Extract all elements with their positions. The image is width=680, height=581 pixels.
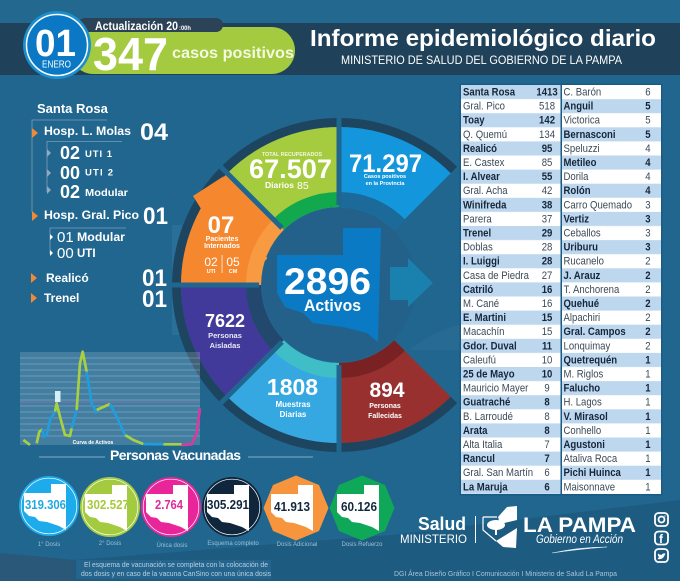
Hosp. Gral. Pico: 01 bbox=[143, 203, 168, 230]
badge: single dose bbox=[141, 477, 201, 549]
title bbox=[310, 25, 656, 67]
left column: 8 bbox=[544, 425, 550, 437]
right column: 5 bbox=[645, 115, 651, 127]
update time pill: Actualización 20 bbox=[95, 21, 178, 33]
right column: 4 bbox=[645, 186, 651, 197]
right column: 4 bbox=[645, 157, 651, 169]
badge: first dose bbox=[19, 476, 79, 548]
right column: 1 bbox=[645, 425, 651, 437]
right column: Alpachiri bbox=[564, 313, 600, 324]
sector: deaths: Fallecidas bbox=[368, 413, 402, 420]
left column: B. Larroudé bbox=[463, 411, 513, 423]
right column: 4 bbox=[645, 143, 651, 155]
title: MINISTERIO DE SALUD DEL GOBIERNO DE LA PAMPA bbox=[341, 55, 622, 67]
right column: H. Lagos bbox=[564, 397, 602, 409]
left column: 10 bbox=[542, 355, 553, 367]
vaccination footnote: El esquema de vacunación se completa con la colocación de bbox=[84, 560, 268, 569]
sector: total positive cases: Casos positivos bbox=[364, 174, 406, 180]
badge: second dose bbox=[80, 477, 140, 547]
sector: hospitalised patients: Internados bbox=[204, 243, 240, 250]
left column: Gral. Pico bbox=[463, 101, 505, 113]
right column: 1 bbox=[645, 468, 651, 479]
right column: 3 bbox=[645, 228, 651, 240]
sector: total positive cases: en la Provincia bbox=[366, 181, 405, 187]
right column: Bernasconi bbox=[564, 129, 616, 141]
sector: daily samples: Muestras bbox=[275, 400, 311, 409]
left column: 85 bbox=[542, 157, 553, 169]
Hosp. L. Molas: 00 bbox=[60, 163, 80, 183]
sector: recovered: 85 bbox=[297, 180, 309, 192]
left column: Catriló bbox=[463, 284, 493, 296]
header band bbox=[0, 11, 680, 80]
left column: 518 bbox=[539, 101, 555, 113]
left column: 8 bbox=[544, 397, 550, 409]
right column: J. Arauz bbox=[564, 270, 600, 282]
right column: Ataliva Roca bbox=[564, 454, 617, 465]
right column: Pichi Huinca bbox=[564, 468, 621, 479]
green pill: daily positive cases: 347 bbox=[93, 28, 168, 80]
left column: E. Castex bbox=[463, 157, 505, 169]
left column: Winifreda bbox=[463, 200, 507, 212]
update time pill bbox=[78, 18, 223, 33]
Hosp. Gral. Pico: 01 bbox=[57, 229, 74, 246]
background arrow bbox=[390, 258, 433, 307]
Hosp. L. Molas: UTI 2 bbox=[85, 168, 113, 178]
Hosp. Gral. Pico: Hosp. Gral. Pico bbox=[44, 209, 139, 222]
left column: 7 bbox=[544, 439, 550, 451]
logo: Ministerio de Salud bbox=[400, 514, 476, 546]
right column: Speluzzi bbox=[564, 143, 600, 155]
right column: 2 bbox=[645, 298, 651, 310]
footer credits: DGI Área Diseño Gráfico I Comunicación I Ministerio de Salud La Pampa bbox=[394, 569, 618, 578]
badge: booster dose: 60.126 bbox=[341, 499, 377, 514]
right column: Ceballos bbox=[564, 228, 601, 240]
vaccination footnote bbox=[76, 560, 271, 579]
Hosp. Gral. Pico bbox=[32, 203, 168, 262]
left column: Gral. Acha bbox=[463, 186, 508, 197]
date badge: 01 bbox=[35, 23, 76, 65]
Realicó: 01 bbox=[142, 265, 167, 292]
right column: Gral. Campos bbox=[564, 327, 626, 338]
left column: I. Alvear bbox=[463, 172, 500, 183]
sector: hospitalised patients: Pacientes bbox=[206, 236, 238, 243]
left column: Mauricio Mayer bbox=[463, 383, 529, 395]
left column: 37 bbox=[542, 214, 553, 226]
right column: 6 bbox=[645, 87, 651, 99]
badge: single dose: Única dosis bbox=[156, 542, 188, 549]
sector: deaths: 894 bbox=[369, 379, 405, 402]
update time pill: :00h bbox=[179, 25, 191, 32]
right column: Anguil bbox=[564, 101, 593, 113]
social media icons bbox=[655, 513, 668, 562]
left column: 9 bbox=[544, 383, 550, 395]
right column: Uriburu bbox=[564, 242, 598, 254]
left column: I. Luiggi bbox=[463, 256, 500, 268]
icon: twitter bbox=[655, 549, 668, 562]
sector: deaths: Personas bbox=[369, 403, 401, 410]
Hosp. Gral. Pico: UTI bbox=[77, 248, 96, 260]
Hosp. L. Molas: 04 bbox=[140, 119, 169, 146]
right column: Vertiz bbox=[564, 214, 589, 226]
Trenel: 01 bbox=[142, 286, 167, 313]
Realicó: Realicó bbox=[46, 271, 89, 285]
left column: 27 bbox=[542, 270, 553, 282]
left column: 15 bbox=[542, 327, 553, 338]
left column: Rancul bbox=[463, 454, 495, 465]
green pill: daily positive cases: casos positivos bbox=[172, 45, 294, 62]
sector: recovered bbox=[227, 127, 339, 230]
right column: 3 bbox=[645, 200, 651, 212]
left column: Trenel bbox=[463, 228, 491, 240]
left column: 28 bbox=[542, 242, 553, 254]
left column: 10 bbox=[542, 369, 553, 381]
left column: Toay bbox=[463, 115, 485, 127]
right column: Falucho bbox=[564, 383, 600, 395]
left column: 28 bbox=[542, 256, 553, 268]
panel: vaccinated people bbox=[19, 447, 394, 549]
logo: Ministerio de Salud: Salud bbox=[418, 514, 466, 534]
Realicó bbox=[31, 265, 167, 292]
left column: 42 bbox=[542, 186, 553, 197]
right column: 1 bbox=[645, 369, 651, 381]
Hosp. L. Molas: UTI 1 bbox=[85, 149, 113, 160]
sector: deaths bbox=[339, 340, 451, 443]
center map: active cases: 2896 bbox=[284, 261, 371, 302]
left column: 55 bbox=[542, 172, 553, 183]
left column: Macachín bbox=[463, 327, 505, 338]
left column: 134 bbox=[539, 129, 555, 141]
Trenel: Trenel bbox=[44, 291, 79, 305]
left column: Realicó bbox=[463, 143, 497, 155]
left column: 7 bbox=[544, 454, 550, 465]
sector: recovered: TOTAL RECUPERADOS bbox=[262, 152, 323, 158]
Trenel bbox=[31, 286, 167, 313]
badge: booster dose: Dosis Refuerzo bbox=[341, 542, 383, 548]
badge: additional dose bbox=[264, 476, 328, 548]
title: Informe epidemiológico diario bbox=[310, 25, 656, 51]
left column: Q. Quemú bbox=[463, 129, 507, 141]
left column: Arata bbox=[463, 425, 488, 437]
right column: 3 bbox=[645, 214, 651, 226]
left column: 142 bbox=[539, 115, 555, 127]
badge: complete schedule bbox=[202, 477, 262, 547]
right column: 1 bbox=[645, 482, 651, 494]
right column bbox=[564, 87, 651, 494]
right column: 5 bbox=[645, 129, 651, 141]
sector: recovered: Diarios bbox=[265, 180, 294, 190]
right column: Quetrequén bbox=[564, 355, 617, 367]
right column: 2 bbox=[645, 341, 651, 353]
date badge bbox=[23, 11, 91, 79]
right column: 3 bbox=[645, 242, 651, 254]
Hosp. L. Molas: 02 bbox=[60, 182, 80, 202]
left column: Gral. San Martín bbox=[463, 468, 533, 479]
sector: isolated people bbox=[181, 285, 284, 397]
right column: 2 bbox=[645, 256, 651, 268]
right column: Quehué bbox=[564, 298, 599, 310]
sector: daily samples: Diarias bbox=[280, 410, 307, 419]
center map: active cases: Activos bbox=[304, 296, 361, 315]
left column: Alta Italia bbox=[463, 439, 503, 451]
left column: M. Cané bbox=[463, 298, 499, 310]
badge: single dose: 2.764 bbox=[155, 497, 184, 512]
left column: 15 bbox=[542, 313, 553, 324]
sector: daily samples bbox=[227, 340, 339, 443]
Hosp. L. Molas: 02 bbox=[60, 143, 80, 163]
center map: active cases bbox=[277, 228, 381, 342]
right column: 1 bbox=[645, 411, 651, 423]
right column: Rucanelo bbox=[564, 256, 604, 268]
left column: 6 bbox=[544, 482, 550, 494]
sector: hospitalised patients: UTI bbox=[207, 269, 216, 275]
sector: hospitalised patients: 07 bbox=[208, 212, 234, 239]
logo: Ministerio de Salud: MINISTERIO bbox=[400, 532, 467, 546]
right column: V. Mirasol bbox=[564, 411, 608, 423]
badge: first dose: 319.306 bbox=[25, 497, 66, 512]
left column: La Maruja bbox=[463, 482, 508, 494]
right column: Metileo bbox=[564, 157, 596, 169]
sector: total positive cases bbox=[339, 127, 451, 230]
line chart: active cases curve: Curva de Activos bbox=[73, 440, 114, 446]
Hosp. L. Molas: Hosp. L. Molas bbox=[44, 124, 131, 138]
right column: M. Riglos bbox=[564, 369, 603, 381]
logo: La Pampa: Gobierno en Acción bbox=[536, 532, 623, 546]
left column: 8 bbox=[544, 411, 550, 423]
left column: 38 bbox=[542, 200, 553, 212]
right column: 1 bbox=[645, 397, 651, 409]
left column bbox=[463, 87, 558, 494]
sector: total positive cases: 71.297 bbox=[349, 150, 422, 178]
right column: C. Barón bbox=[564, 87, 601, 99]
right column: 4 bbox=[645, 172, 651, 183]
right column: 5 bbox=[645, 101, 651, 113]
Hosp. L. Molas bbox=[32, 119, 169, 202]
left column: 95 bbox=[542, 143, 553, 155]
right column: Maisonnave bbox=[564, 482, 615, 494]
right column: 1 bbox=[645, 355, 651, 367]
right column: 2 bbox=[645, 313, 651, 324]
right column: 2 bbox=[645, 327, 651, 338]
badge: first dose: 1° Dosis bbox=[38, 542, 60, 548]
Hosp. Gral. Pico: 00 bbox=[57, 245, 74, 262]
panel: hospitalised patients by location: Santa Rosa bbox=[37, 101, 109, 116]
icon: instagram bbox=[655, 513, 668, 526]
right column: Victorica bbox=[564, 115, 600, 127]
chart: ring of indicators bbox=[170, 115, 454, 455]
right column: Rolón bbox=[564, 186, 591, 197]
left column: Gdor. Duval bbox=[463, 341, 517, 353]
left column: Guatraché bbox=[463, 397, 511, 409]
sector: isolated people: Aisladas bbox=[210, 341, 240, 350]
left column: 29 bbox=[542, 228, 553, 240]
sector: recovered: 67.507 bbox=[249, 154, 332, 184]
left column: 16 bbox=[542, 298, 553, 310]
right column: Agustoni bbox=[564, 439, 605, 451]
right column: Carro Quemado bbox=[564, 200, 632, 212]
right column: 2 bbox=[645, 270, 651, 282]
badge: second dose: 302.527 bbox=[87, 497, 129, 512]
right column: 1 bbox=[645, 454, 651, 465]
left column: E. Martini bbox=[463, 313, 506, 324]
right column: Lonquimay bbox=[564, 341, 611, 353]
right column: 1 bbox=[645, 439, 651, 451]
sector: isolated people: Personas bbox=[208, 331, 242, 340]
left column: 11 bbox=[542, 341, 552, 353]
icon: facebook: f bbox=[659, 532, 664, 546]
logo: La Pampa: LA PAMPA bbox=[523, 514, 636, 537]
right column: 1 bbox=[645, 383, 651, 395]
table: cases by town bbox=[460, 84, 662, 496]
right column: Conhello bbox=[564, 425, 601, 437]
badge: additional dose: 41.913 bbox=[274, 499, 310, 514]
left column: Santa Rosa bbox=[463, 87, 515, 99]
vaccination footnote: dos dosis y en caso de la vacuna CanSino con una única dosis bbox=[81, 569, 271, 578]
badge: booster dose bbox=[330, 476, 394, 548]
left column: Caleufú bbox=[463, 355, 496, 367]
left column: 16 bbox=[542, 284, 553, 296]
right column: 2 bbox=[645, 284, 651, 296]
logo: La Pampa bbox=[483, 506, 636, 553]
badge: complete schedule: 305.291 bbox=[207, 497, 249, 512]
heading: Personas Vacunadas bbox=[110, 447, 241, 463]
left column: Doblas bbox=[463, 242, 493, 254]
line chart: active cases curve bbox=[20, 352, 200, 446]
left column: 25 de Mayo bbox=[463, 369, 515, 381]
date badge: ENERO bbox=[42, 60, 71, 70]
badge: complete schedule: Esquema completo bbox=[207, 541, 259, 547]
left column: Parera bbox=[463, 214, 492, 226]
sector: isolated people: 7622 bbox=[205, 311, 245, 331]
badge: second dose: 2° Dosis bbox=[99, 541, 121, 547]
badge: additional dose: Dosis Adicional bbox=[277, 542, 317, 548]
panel: hospitalised patients by location bbox=[31, 101, 169, 313]
green pill: daily positive cases bbox=[70, 27, 295, 80]
right column: Dorila bbox=[564, 172, 589, 183]
sector: hospitalised patients bbox=[181, 173, 284, 285]
left column: 1413 bbox=[536, 87, 558, 99]
right column: T. Anchorena bbox=[564, 284, 620, 296]
Hosp. L. Molas: Modular bbox=[85, 187, 128, 199]
sector: hospitalised patients: 02 bbox=[204, 255, 218, 269]
left column: 6 bbox=[544, 468, 550, 479]
Hosp. Gral. Pico: Modular bbox=[77, 232, 126, 244]
sector: daily samples: 1808 bbox=[267, 374, 318, 400]
sector: hospitalised patients: 05 bbox=[226, 255, 240, 269]
sector: hospitalised patients: CM bbox=[229, 269, 238, 275]
left column: Casa de Piedra bbox=[463, 270, 529, 282]
